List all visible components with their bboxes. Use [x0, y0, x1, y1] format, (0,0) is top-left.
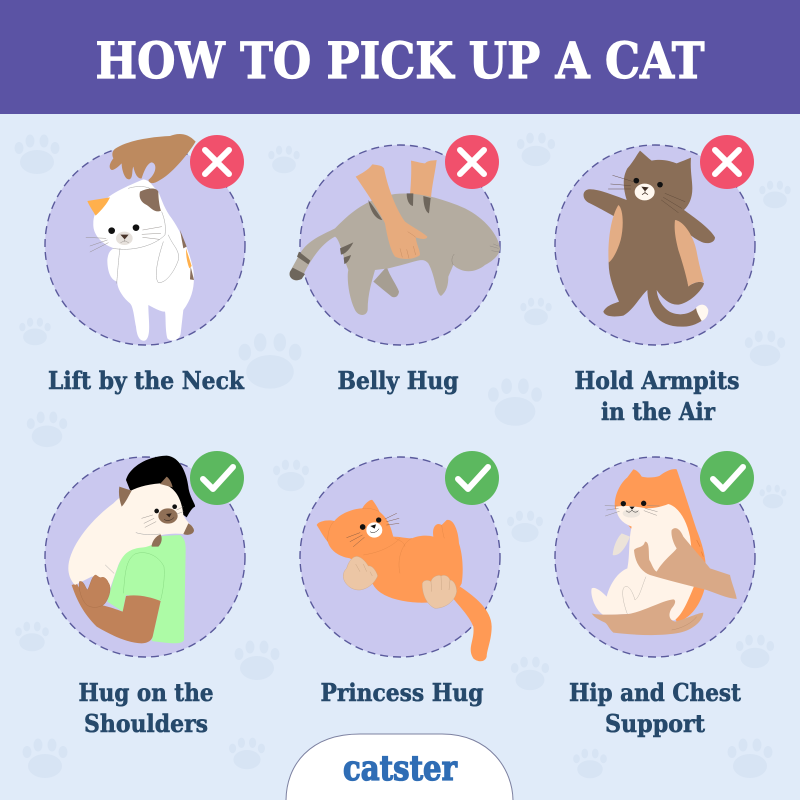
label: hip and chest support: Hip and Chest — [569, 678, 741, 707]
label: hip and chest support — [569, 678, 741, 738]
label: princess hug: Princess Hug — [320, 678, 484, 707]
panel: belly hug — [290, 135, 500, 395]
label: hug on the shoulders — [78, 678, 214, 738]
label: lift by the neck: Lift by the Neck — [48, 366, 245, 395]
label: hold armpits in the air — [574, 366, 740, 426]
panel: princess hug — [300, 451, 500, 707]
illustration: white cat lifted by the neck — [86, 134, 196, 341]
label: hold armpits in the air: in the Air — [601, 397, 715, 426]
illustration: orange cat cradled on its back — [317, 500, 492, 661]
label: hold armpits in the air: Hold Armpits — [574, 366, 740, 395]
logo tab: catster — [286, 734, 513, 800]
panel: lift by the neck — [45, 134, 245, 395]
icon: red cross badge — [700, 135, 754, 189]
label: belly hug: Belly Hug — [338, 366, 459, 395]
icon: red cross badge — [190, 135, 244, 189]
illustration: cream cat on a person's shoulder — [68, 456, 195, 643]
label: hip and chest support: Support — [605, 709, 705, 738]
title: HOW TO PICK UP A CAT — [96, 32, 705, 90]
logo wordmark: catster — [343, 748, 457, 789]
illustration: grey cat hugged by the belly — [290, 160, 500, 315]
icon: green check badge — [445, 451, 499, 505]
icon: red cross badge — [445, 135, 499, 189]
icon: green check badge — [700, 451, 754, 505]
panel: hip and chest support — [555, 451, 755, 738]
header banner — [0, 0, 800, 114]
illustration: orange and cream cat supported at hip and chest — [591, 469, 737, 635]
label: hug on the shoulders: Shoulders — [84, 709, 208, 738]
illustration: brown cat held by the armpits — [584, 151, 715, 327]
background paw prints — [14, 133, 791, 778]
panel: hug on the shoulders — [45, 451, 245, 738]
label: hug on the shoulders: Hug on the — [78, 678, 214, 707]
panel: hold armpits in the air — [555, 135, 755, 426]
icon: green check badge — [190, 451, 244, 505]
